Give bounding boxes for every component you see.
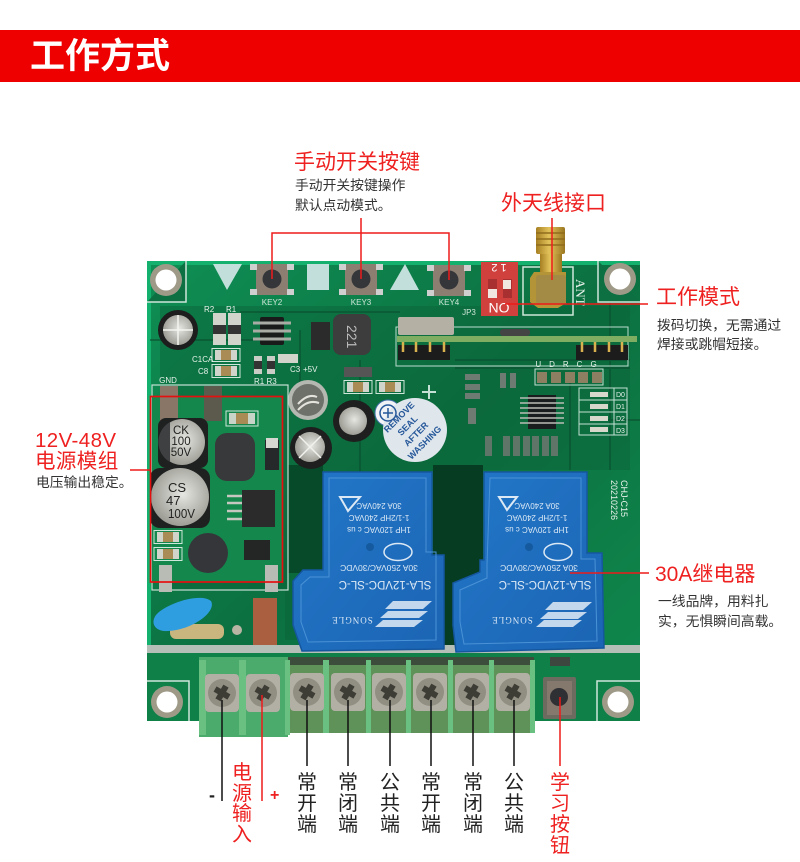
- relay right: SLA-12VDC-SL-C: [499, 578, 591, 590]
- heading: external antenna: 外天线接口: [501, 192, 606, 214]
- label: power input: 源: [232, 783, 252, 805]
- DIP switch: JP3: [462, 308, 476, 317]
- label: plus: +: [270, 787, 279, 804]
- text: relay: 一线品牌，用料扎: [658, 594, 768, 609]
- label: common 1: 端: [380, 814, 400, 836]
- label: common 1: 公: [380, 772, 400, 794]
- SMA antenna connector: [523, 227, 588, 315]
- power supply module: 50V: [171, 447, 192, 459]
- top left components: C3: [290, 365, 301, 374]
- label: common 1: 共: [380, 793, 400, 815]
- buzzer: [375, 398, 447, 462]
- RF receiver module: [396, 317, 637, 366]
- learn key: [543, 657, 576, 719]
- power supply module: GND: [159, 376, 177, 385]
- U1 chip and pads: D0: [616, 392, 625, 399]
- label: common 2: 共: [504, 793, 524, 815]
- power supply module: CK: [173, 425, 189, 437]
- label: normally closed 2: 闭: [463, 793, 483, 815]
- label: normally open 1: [297, 772, 317, 836]
- label: power input: [232, 762, 252, 846]
- heading: work mode: 工作模式: [656, 286, 740, 308]
- heading: manual keys: 手动开关按键: [294, 150, 420, 174]
- label: normally open 1: 端: [297, 814, 317, 836]
- relay left: 30A 240VAC: [356, 501, 402, 510]
- power supply module: 47: [166, 493, 180, 508]
- power supply module: 100: [171, 436, 191, 448]
- text: work mode: 焊接或跳帽短接。: [657, 337, 767, 352]
- relay right: 30A 250VAC/30VDC: [500, 563, 578, 573]
- relay left: [293, 472, 444, 651]
- label: normally open 2: 端: [421, 814, 441, 836]
- buzzer: SEAL: [396, 413, 420, 438]
- label: normally open 1: 开: [297, 793, 317, 815]
- label: normally closed 2: 常: [463, 772, 483, 794]
- heading: relay: 30A继电器: [655, 562, 755, 586]
- label: normally closed 1: 端: [338, 814, 358, 836]
- top left components: C8: [198, 367, 209, 376]
- heading: power module: [35, 429, 119, 472]
- relay right: 1HP 120VAC c us: [505, 525, 569, 534]
- title: 工作方式: [30, 37, 170, 76]
- relay right: 1-1/2HP 240VAC: [506, 513, 567, 522]
- label: power input: 电: [232, 762, 252, 784]
- red callout lines: [130, 218, 649, 801]
- board body: [147, 261, 640, 721]
- label: common 1: [380, 772, 400, 836]
- black terminal lines: [222, 700, 514, 801]
- key switches: KEY3: [351, 298, 372, 307]
- label: common 2: 端: [504, 814, 524, 836]
- title banner: [0, 30, 800, 82]
- label: normally open 2: [421, 772, 441, 836]
- label: normally closed 2: [463, 772, 483, 836]
- label: normally open 1: 常: [297, 772, 317, 794]
- buzzer: REMOVE: [382, 400, 416, 434]
- text: manual keys: 默认点动模式。: [295, 198, 392, 212]
- label: learn key: 习: [550, 793, 570, 815]
- text: manual keys: [295, 178, 405, 212]
- top left components: R2: [204, 305, 215, 314]
- screw terminals: [199, 657, 535, 737]
- text: power module: 电压输出稳定。: [36, 475, 133, 490]
- label: learn key: 钮: [550, 835, 570, 857]
- relay left: 1HP 120VAC c us: [347, 525, 411, 534]
- text: relay: 实，无惧瞬间高载。: [658, 614, 782, 629]
- label: learn key: 学: [550, 772, 570, 794]
- SMA antenna connector: ANT: [573, 279, 588, 306]
- DIP switch: 1 2: [491, 261, 507, 273]
- key switches: KEY4: [439, 298, 460, 307]
- DIP switch: ON: [488, 300, 510, 316]
- key switches: KEY2: [262, 298, 283, 307]
- U1 chip and pads: UDRCG: [535, 360, 605, 369]
- power supply module: 100V: [168, 506, 195, 521]
- label: learn key: [550, 772, 570, 857]
- U1 chip and pads: D1: [616, 404, 625, 411]
- label: common 2: [504, 772, 524, 836]
- label: normally open 2: 常: [421, 772, 441, 794]
- text: manual keys: 手动开关按键操作: [295, 178, 405, 193]
- top left components: R1: [226, 305, 237, 314]
- label: common 2: 公: [504, 772, 524, 794]
- DIP switch: [462, 261, 518, 317]
- electrolytic capacitors and coil: [288, 380, 375, 469]
- power supply module: CS: [168, 480, 186, 495]
- label: normally closed 1: [338, 772, 358, 836]
- U1 chip and pads: D3: [616, 428, 625, 435]
- label: normally open 2: 开: [421, 793, 441, 815]
- relay left: 1-1/2HP 240VAC: [348, 513, 409, 522]
- relay right: [453, 472, 604, 652]
- label: power input: 入: [232, 824, 252, 846]
- label: normally closed 2: 端: [463, 814, 483, 836]
- relay left: 30A 250VAC/30VDC: [340, 563, 418, 573]
- relay left: SONGLE: [331, 615, 373, 625]
- relay left: SLA-12VDC-SL-C: [339, 578, 431, 590]
- buzzer: AFTER: [402, 420, 431, 448]
- label: learn key: 按: [550, 814, 570, 836]
- label: normally closed 1: 常: [338, 772, 358, 794]
- label: power input: 输: [232, 803, 252, 825]
- key switches: [250, 264, 471, 307]
- top left components: 221: [344, 325, 360, 349]
- label: normally closed 1: 闭: [338, 793, 358, 815]
- text: work mode: 拨码切换，无需通过: [657, 318, 781, 333]
- top left components: R1 R3: [254, 377, 277, 386]
- top left components: C1CA: [192, 355, 214, 364]
- board markings: [609, 480, 629, 520]
- top left components: [158, 305, 404, 394]
- silkscreen direction marks: [213, 264, 419, 290]
- U1 chip and pads: D2: [616, 416, 625, 423]
- relay right: SONGLE: [491, 615, 533, 625]
- U1 chip and pads: [422, 360, 627, 456]
- label: minus: -: [209, 785, 215, 805]
- power supply module: [150, 376, 288, 592]
- mounting holes: [147, 261, 640, 721]
- heading: power module: 12V-48V: [35, 429, 116, 452]
- text: work mode: [657, 318, 781, 352]
- varistor, resistor and fuse: [153, 598, 277, 645]
- board markings: 20210226: [609, 480, 619, 520]
- heading: power module: 电源模组: [35, 450, 119, 472]
- relay right: 30A 240VAC: [514, 501, 560, 510]
- top left components: +5V: [303, 365, 318, 374]
- red outline around power module: [150, 396, 282, 582]
- board markings: CHJ-C15: [619, 480, 629, 517]
- buzzer: WASHING: [406, 424, 443, 461]
- text: relay: [658, 594, 782, 629]
